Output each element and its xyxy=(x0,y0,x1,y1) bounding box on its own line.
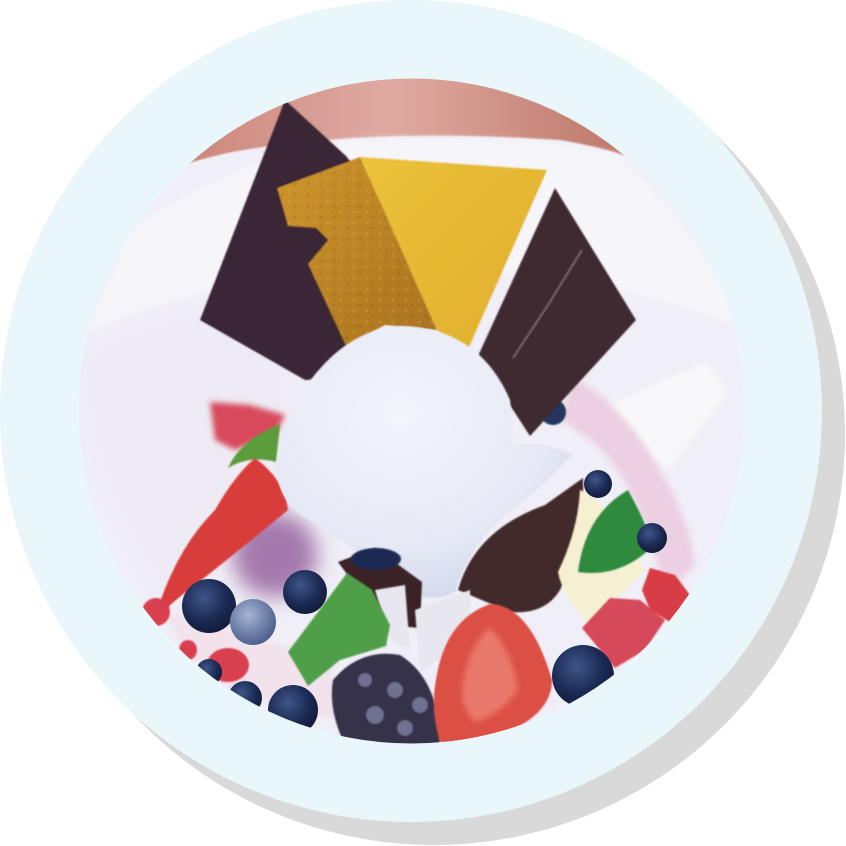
berry sauce streak xyxy=(560,378,695,595)
pink table background xyxy=(189,78,626,164)
berry compote xyxy=(233,513,317,597)
chocolate shard right xyxy=(478,188,636,436)
blackberry xyxy=(332,654,440,745)
plate background xyxy=(70,70,760,760)
photo: dessert in round frame xyxy=(70,70,760,760)
mint leaf top left xyxy=(228,424,280,468)
cream base xyxy=(170,616,334,716)
ice cream scoop xyxy=(276,326,572,598)
chocolate shard left xyxy=(200,100,420,380)
mint leaf center xyxy=(288,573,390,686)
blueberries xyxy=(182,579,236,633)
strawberry halved xyxy=(434,604,552,743)
bowl rim xyxy=(334,134,624,156)
cream center xyxy=(374,584,471,629)
whipped cream right xyxy=(558,490,645,625)
chocolate mousse xyxy=(458,478,583,612)
bowl inner shading xyxy=(80,302,300,610)
small blueberry behind shard xyxy=(543,401,567,426)
raspberry behind xyxy=(210,402,285,450)
raspberries right xyxy=(582,598,665,668)
gold sugar shard xyxy=(277,157,547,356)
chocolate piece under scoop xyxy=(338,548,422,628)
strawberry slice left xyxy=(160,458,288,610)
mint leaf right xyxy=(578,490,652,573)
